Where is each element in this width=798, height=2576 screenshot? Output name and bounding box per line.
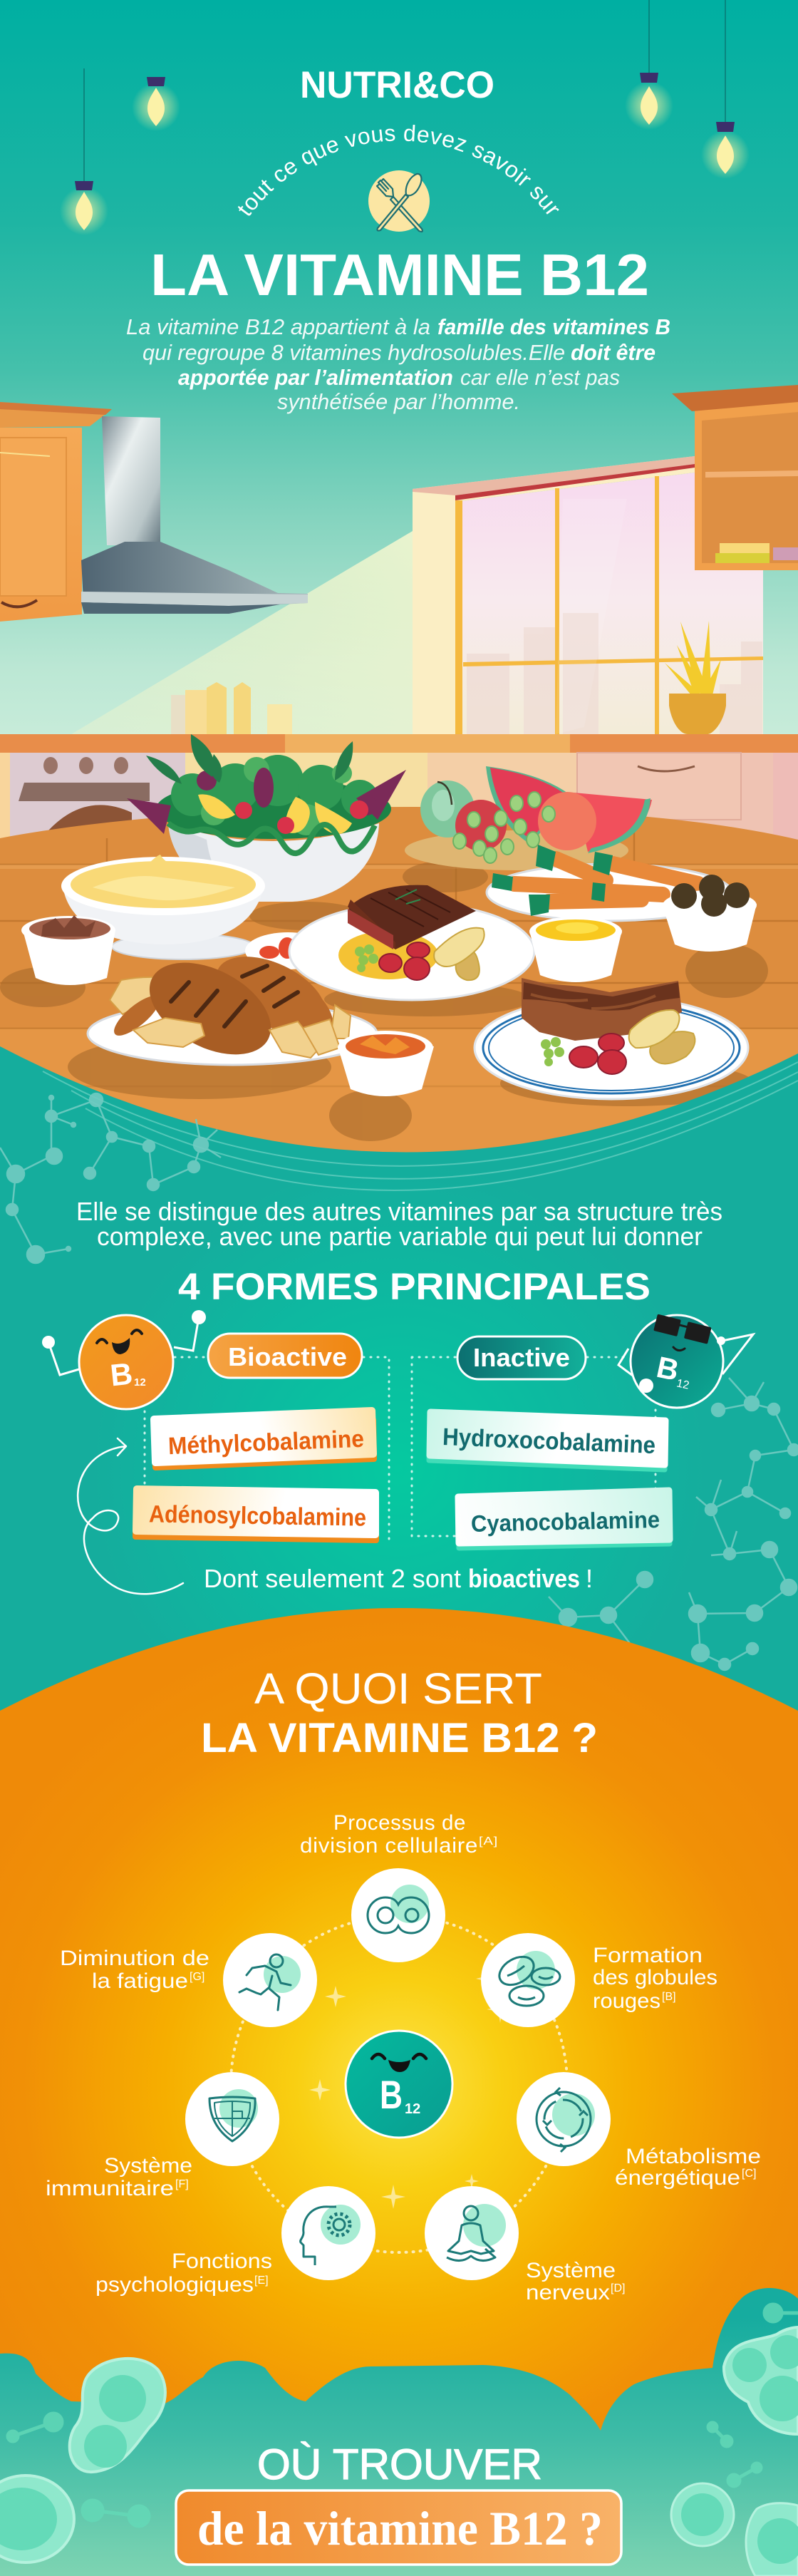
forms paragraph: Elle se distingue des autres vitamines par sa structure très	[76, 1197, 722, 1226]
central B12 character: B	[380, 2072, 403, 2117]
boxes on the counter	[171, 682, 292, 734]
steak plate	[289, 885, 534, 1000]
forms paragraph	[76, 1197, 722, 1251]
kitchen background wall and sky gradient	[0, 0, 798, 756]
label: systeme nerveux: [D]	[611, 2282, 625, 2294]
cell: large bean left	[70, 2359, 165, 2472]
card: Méthylcobalamine	[154, 1411, 374, 1468]
cell: bottom right	[671, 2483, 798, 2576]
label: systeme immunitaire	[46, 2154, 192, 2200]
heading: a quoi sert: A QUOI SERT	[254, 1664, 542, 1713]
intro paragraph	[126, 314, 670, 414]
orange section background	[0, 1608, 798, 2538]
label: fonctions psychologiques: [E]	[254, 2274, 269, 2287]
title: LA VITAMINE B12	[150, 242, 649, 308]
intro paragraph: La vitamine B12 appartient à la	[126, 314, 430, 339]
note: only 2 are bioactive: Dont seulement 2 sont	[204, 1564, 461, 1593]
card: Adénosylcobalamine: Adénosylcobalamine	[149, 1500, 366, 1532]
food shadows on table	[0, 861, 768, 1141]
label: metabolisme energetique	[615, 2145, 761, 2190]
sunbeam	[71, 531, 470, 734]
label: systeme immunitaire: [F]	[175, 2178, 189, 2190]
label: division cellulaire: division cellulaire	[300, 1834, 478, 1858]
label: systeme immunitaire: immunitaire	[46, 2177, 174, 2200]
small cup: yellow	[529, 917, 622, 982]
wavy teal bottom section	[0, 2288, 798, 2576]
label: diminution de la fatigue: Diminution de	[60, 1947, 209, 1970]
dotted connectors	[145, 1357, 656, 1540]
intro paragraph: doit être	[571, 340, 656, 365]
heading: ou trouver: OÙ TROUVER	[257, 2441, 542, 2488]
label: globules rouges: Formation	[593, 1944, 703, 1967]
small cup: meat	[21, 915, 115, 985]
label: globules rouges: des globules	[593, 1966, 717, 1989]
label: division cellulaire	[300, 1811, 498, 1858]
dotted ring and sparkles	[231, 1916, 567, 2252]
hanging light bulbs	[60, 0, 750, 235]
right wall cabinet	[672, 385, 798, 570]
intro paragraph: synthétisée par l’homme.	[277, 389, 520, 414]
icon: plate with fork and spoon	[368, 170, 430, 232]
icon: runner	[223, 1933, 317, 2027]
curved subtitle: tout ce que vous devez savoir sur	[238, 125, 559, 216]
small tomato plate	[245, 932, 331, 969]
icon: cell division	[351, 1868, 445, 1962]
character: bioactive orange B12	[42, 1310, 206, 1409]
label: systeme nerveux	[526, 2259, 625, 2304]
fruit basket	[405, 766, 652, 870]
card: Cyanocobalamine	[458, 1490, 670, 1548]
pill: Bioactive	[208, 1334, 362, 1378]
label: systeme nerveux: Système	[526, 2259, 616, 2282]
intro paragraph: qui regroupe 8 vitamines hydrosolubles.Elle	[142, 340, 565, 365]
potted plant	[665, 621, 726, 734]
label: diminution de la fatigue: [G]	[190, 1971, 204, 1983]
label: fonctions psychologiques: psychologiques	[95, 2273, 254, 2297]
character: bioactive orange B12: 12	[134, 1376, 146, 1389]
heading: 4 formes principales: 4 FORMES PRINCIPALES	[178, 1266, 651, 1308]
pill: Inactive: Inactive	[473, 1343, 570, 1372]
left wall cabinet	[0, 402, 112, 622]
character: bioactive orange B12: B	[108, 1356, 134, 1393]
teal section background	[0, 1046, 798, 1732]
wooden table	[0, 805, 798, 1169]
heading: la vitamine B12: LA VITAMINE B12 ?	[201, 1715, 598, 1761]
label: division cellulaire: Processus de	[333, 1811, 466, 1835]
label: systeme nerveux: nerveux	[526, 2281, 610, 2304]
label: metabolisme energetique: [C]	[742, 2168, 756, 2180]
character: inactive teal B12 with sunglasses: B	[654, 1350, 682, 1387]
card: Hydroxocobalamine	[429, 1412, 665, 1470]
label: systeme immunitaire: Système	[104, 2154, 192, 2178]
label: division cellulaire: [A]	[479, 1835, 498, 1848]
arc lines under the table	[43, 1062, 798, 1190]
central B12 character: 12	[405, 2101, 420, 2117]
icon: red blood cells	[481, 1933, 575, 2027]
range hood	[81, 416, 308, 614]
icon: head with gear	[281, 2186, 375, 2280]
label: metabolisme energetique: énergétique	[615, 2166, 740, 2190]
pill: Bioactive: Bioactive	[228, 1342, 347, 1371]
looping arrow	[78, 1438, 183, 1594]
label: diminution de la fatigue: la fatigue	[92, 1969, 188, 1993]
note: only 2 are bioactive: !	[586, 1564, 593, 1593]
label: fonctions psychologiques: Fonctions	[172, 2250, 272, 2273]
character: inactive teal B12 with sunglasses: 12	[675, 1377, 690, 1392]
label: diminution de la fatigue	[60, 1947, 209, 1993]
note: only 2 are bioactive	[204, 1564, 593, 1593]
intro paragraph: car elle n’est pas	[460, 365, 620, 390]
puree plate and bowl	[61, 855, 265, 959]
counter and lower cabinets	[0, 734, 798, 845]
window	[413, 456, 763, 734]
intro paragraph: apportée par l’alimentation	[178, 365, 453, 390]
orange title box	[176, 2490, 621, 2565]
small cup: carrots	[338, 1031, 434, 1096]
label: fonctions psychologiques	[95, 2250, 272, 2297]
blue-rimmed plate with meat	[475, 978, 748, 1099]
label: globules rouges	[593, 1944, 717, 2013]
card: Adénosylcobalamine	[135, 1489, 376, 1540]
orange title box: de la vitamine B12 ?	[197, 2501, 603, 2555]
cell: bottom left	[0, 2475, 74, 2562]
carrot plate	[487, 845, 732, 921]
forms paragraph: complexe, avec une partie variable qui peut lui donner	[97, 1222, 703, 1251]
label: globules rouges: rouges	[593, 1989, 660, 2013]
card: Cyanocobalamine: Cyanocobalamine	[471, 1506, 660, 1537]
small cup: mushrooms	[662, 875, 757, 952]
pill: Inactive	[457, 1336, 586, 1379]
icon: meditation person	[425, 2186, 519, 2280]
molecule network: right	[549, 1378, 798, 1670]
card: Méthylcobalamine: Méthylcobalamine	[167, 1426, 365, 1460]
chicken plate	[88, 941, 377, 1073]
label: globules rouges: [B]	[662, 1991, 676, 2003]
note: only 2 are bioactive: bioactives	[468, 1564, 580, 1593]
intro paragraph: famille des vitamines B	[437, 314, 670, 339]
molecule network: top left	[0, 1093, 221, 1263]
logo NUTRI&CO: NUTRI&CO	[300, 64, 494, 106]
icon: energy metabolism cycle	[517, 2072, 611, 2166]
card: Hydroxocobalamine: Hydroxocobalamine	[442, 1423, 656, 1459]
label: metabolisme energetique: Métabolisme	[626, 2145, 761, 2168]
central B12 character	[346, 2031, 452, 2138]
icon: shield	[185, 2072, 279, 2166]
character: inactive teal B12 with sunglasses	[618, 1314, 753, 1408]
cell: blob right	[724, 2327, 798, 2434]
small dumbbell molecules	[8, 2304, 798, 2526]
salad bowl	[127, 734, 406, 902]
